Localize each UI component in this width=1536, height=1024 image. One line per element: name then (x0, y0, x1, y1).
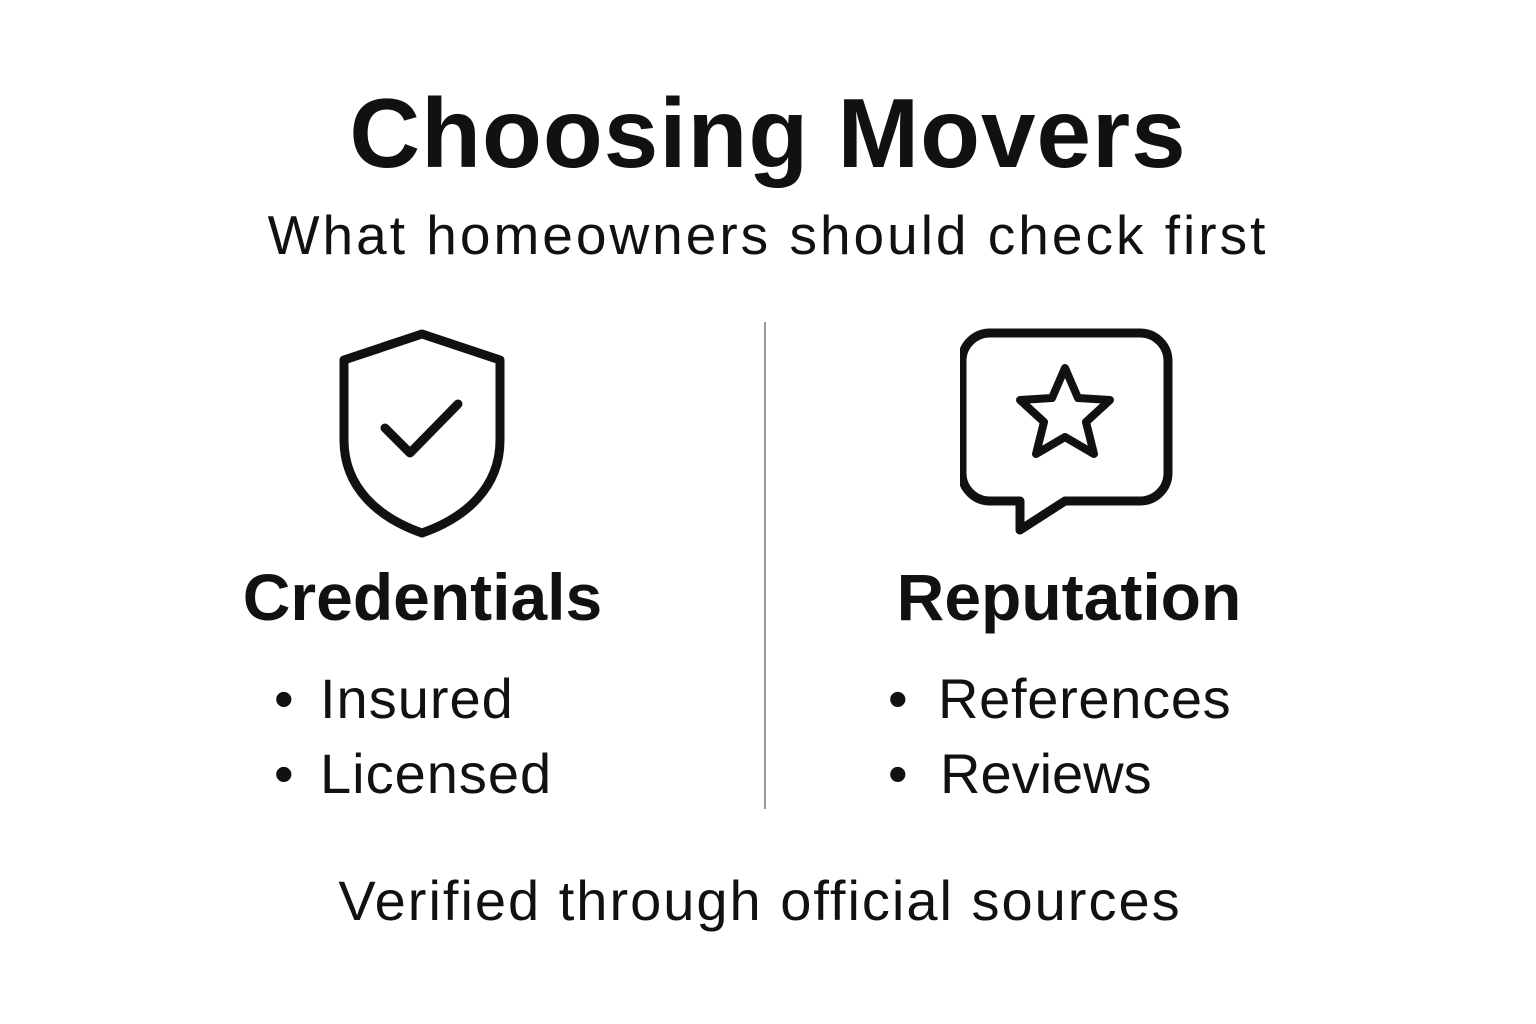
panel: credentials (243, 330, 602, 805)
list: credentials items: • (274, 742, 294, 805)
list: credentials items: Insured (320, 667, 514, 730)
footer note: Verified through official sources (338, 869, 1182, 932)
list: reputation items: • (888, 742, 908, 805)
list: reputation items: • (888, 667, 908, 730)
list: credentials items (274, 667, 552, 805)
list: reputation items: References (938, 667, 1231, 730)
list: credentials items: Licensed (320, 742, 552, 805)
divider (764, 322, 766, 809)
list: reputation items (888, 667, 1231, 805)
list: reputation items: Reviews (940, 742, 1152, 805)
heading: Credentials: Credentials (243, 560, 602, 634)
title: Choosing Movers (349, 78, 1187, 188)
panel: reputation (888, 328, 1241, 805)
heading: Reputation: Reputation (897, 560, 1241, 634)
icon: shield with check (340, 330, 504, 538)
subtitle: What homeowners should check first (268, 204, 1268, 266)
icon: speech bubble with star (960, 328, 1172, 534)
list: credentials items: • (274, 667, 294, 730)
